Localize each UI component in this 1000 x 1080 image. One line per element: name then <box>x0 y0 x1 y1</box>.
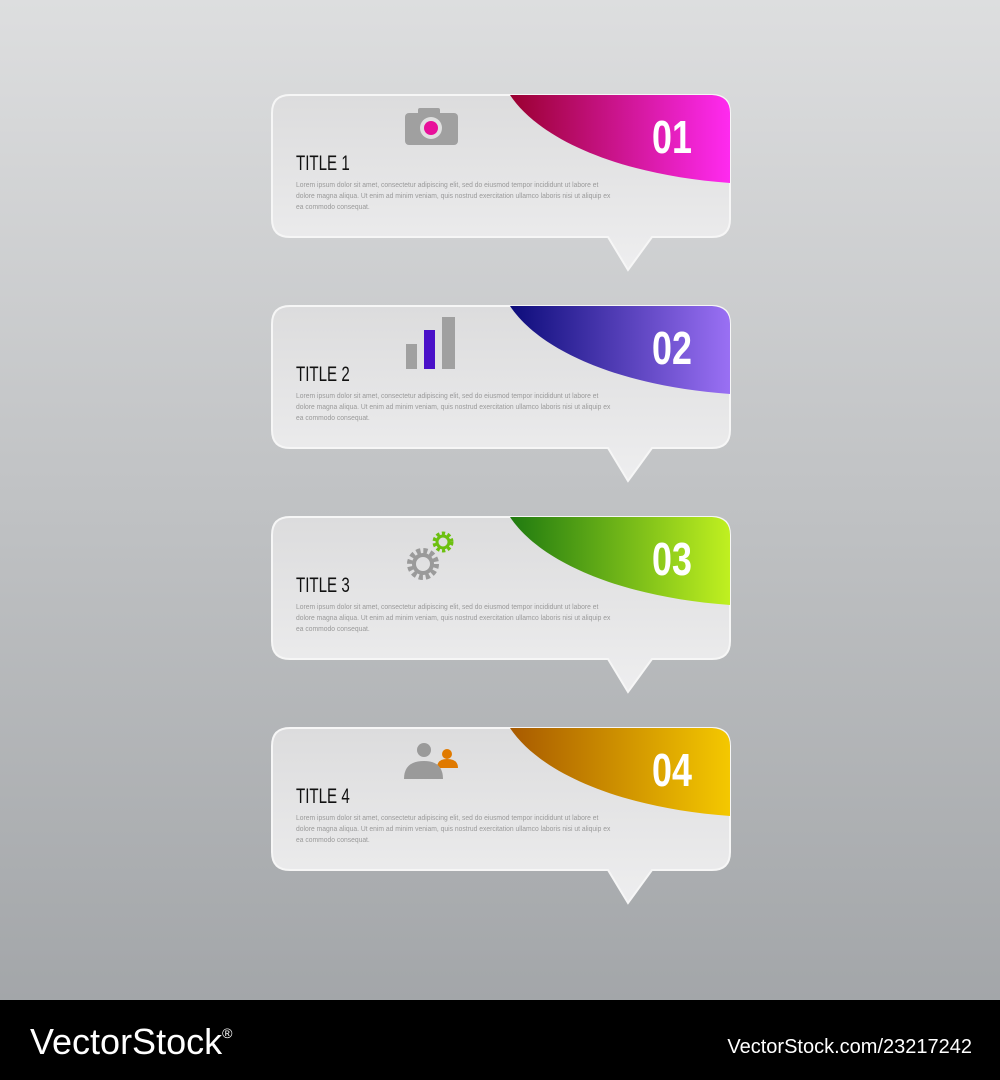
body text 4 <box>296 814 611 844</box>
body text 1: Lorem ipsum dolor sit amet, consectetur adipiscing elit, sed do eiusmod tempor incididunt ut labore et <box>296 181 598 189</box>
body text 3: Lorem ipsum dolor sit amet, consectetur adipiscing elit, sed do eiusmod tempor incididunt ut labore et <box>296 603 598 611</box>
card 4 <box>272 728 730 903</box>
title 1: TITLE 1 <box>296 150 350 175</box>
title 2: TITLE 2 <box>296 361 350 386</box>
body text 3: dolore magna aliqua. Ut enim ad minim veniam, quis nostrud exercitation ullamco laboris nisi ut aliquip ex <box>296 614 611 622</box>
card 1 <box>272 95 730 270</box>
icon: bar chart <box>406 317 455 369</box>
body text 2 <box>296 392 611 422</box>
body text 1 <box>296 181 611 211</box>
number 04: 04 <box>652 745 692 796</box>
colored cap 2 <box>510 306 730 394</box>
body text 2: dolore magna aliqua. Ut enim ad minim veniam, quis nostrud exercitation ullamco laboris nisi ut aliquip ex <box>296 403 611 411</box>
icon: gears <box>410 534 451 577</box>
number 02: 02 <box>652 323 692 374</box>
body text 3 <box>296 603 611 633</box>
footer id: VectorStock.com/23217242 <box>727 1036 972 1058</box>
footer bar <box>0 1000 1000 1080</box>
body text 1: dolore magna aliqua. Ut enim ad minim veniam, quis nostrud exercitation ullamco laboris nisi ut aliquip ex <box>296 192 611 200</box>
body text 2: Lorem ipsum dolor sit amet, consectetur adipiscing elit, sed do eiusmod tempor incididunt ut labore et <box>296 392 598 400</box>
number 03: 03 <box>652 534 692 585</box>
number 01: 01 <box>652 112 692 163</box>
title 3: TITLE 3 <box>296 572 350 597</box>
colored cap 1 <box>510 95 730 183</box>
body text 2: ea commodo consequat. <box>296 414 370 422</box>
colored cap 3 <box>510 517 730 605</box>
icon: users <box>404 743 458 779</box>
footer logo: ® <box>222 1025 233 1041</box>
body text 4: ea commodo consequat. <box>296 836 370 844</box>
icon: camera <box>405 108 458 145</box>
colored cap 4 <box>510 728 730 816</box>
body text 4: dolore magna aliqua. Ut enim ad minim veniam, quis nostrud exercitation ullamco laboris nisi ut aliquip ex <box>296 825 611 833</box>
card 3 <box>272 517 730 692</box>
card 2 <box>272 306 730 481</box>
body text 3: ea commodo consequat. <box>296 625 370 633</box>
title 4: TITLE 4 <box>296 783 350 808</box>
body text 1: ea commodo consequat. <box>296 203 370 211</box>
body text 4: Lorem ipsum dolor sit amet, consectetur adipiscing elit, sed do eiusmod tempor incididunt ut labore et <box>296 814 598 822</box>
footer logo: VectorStock <box>30 1021 222 1062</box>
